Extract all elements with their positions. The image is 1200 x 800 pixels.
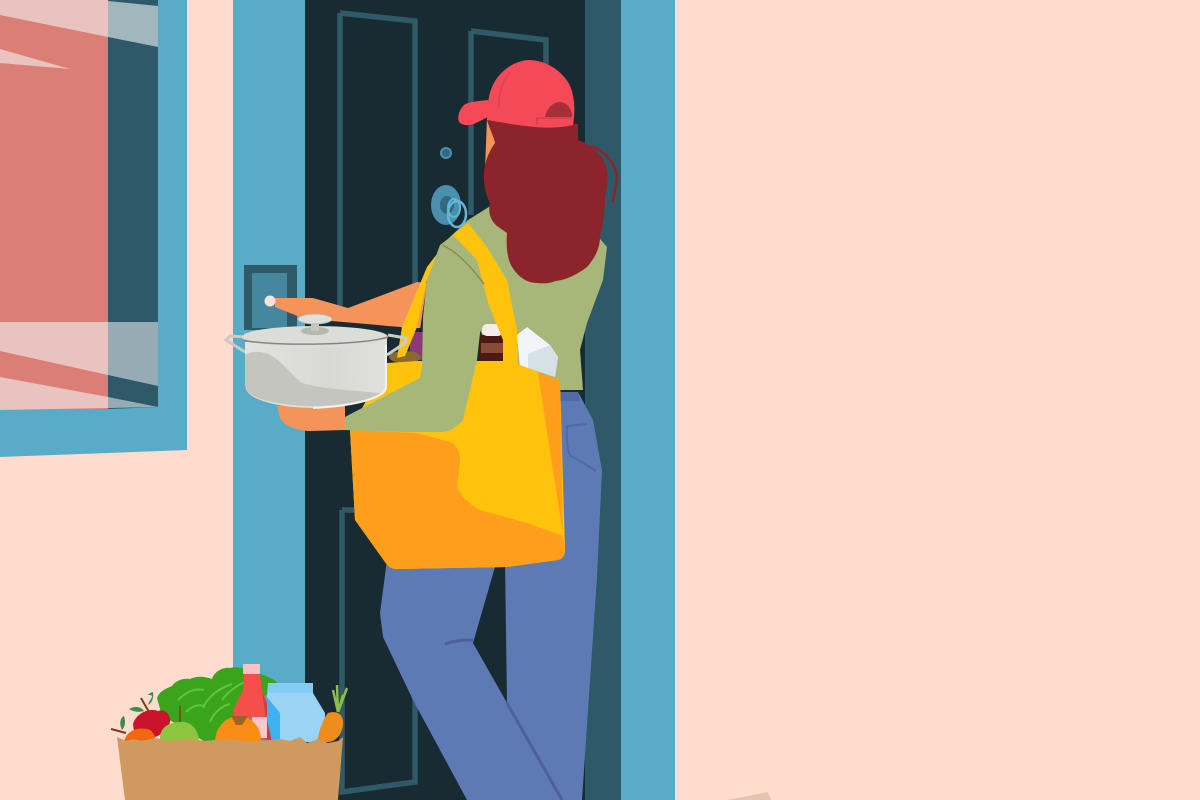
- bag contents: [388, 324, 558, 377]
- shirt sleeve: [343, 235, 488, 432]
- door knocker: [431, 185, 466, 227]
- bag strap right: [453, 223, 518, 375]
- ketchup bottle: [234, 664, 273, 740]
- lower hand: [277, 406, 345, 431]
- hair: [484, 120, 617, 283]
- face: [485, 118, 497, 170]
- box corner bottom right: [727, 792, 771, 800]
- peephole: [441, 148, 451, 158]
- paper bag: [117, 737, 343, 800]
- pot handles: [226, 336, 245, 352]
- bag strap left: [397, 223, 468, 358]
- persimmon: [215, 716, 261, 742]
- pot body: [245, 337, 387, 408]
- lid knob: [301, 327, 329, 335]
- green apple: [160, 706, 199, 741]
- raised arm pressing doorbell: [275, 282, 427, 330]
- door: [305, 0, 585, 800]
- cap: [458, 60, 574, 128]
- shirt body: [450, 205, 607, 390]
- carrot: [317, 685, 347, 742]
- person delivering food: [226, 60, 617, 800]
- doorbell plate: [244, 265, 297, 330]
- pot lid: [242, 326, 388, 348]
- grocery bag on floor: [111, 664, 347, 800]
- lettuce: [157, 667, 277, 742]
- cooking pot: [226, 314, 406, 408]
- window: [0, 0, 187, 457]
- tote bag: [350, 223, 565, 569]
- milk carton: [267, 683, 325, 742]
- doorbell button: [264, 296, 276, 306]
- orange fruit: [111, 716, 155, 742]
- door frame: [233, 0, 675, 800]
- apple: [129, 692, 170, 738]
- sleeve crease: [442, 245, 484, 284]
- jeans: [380, 392, 602, 800]
